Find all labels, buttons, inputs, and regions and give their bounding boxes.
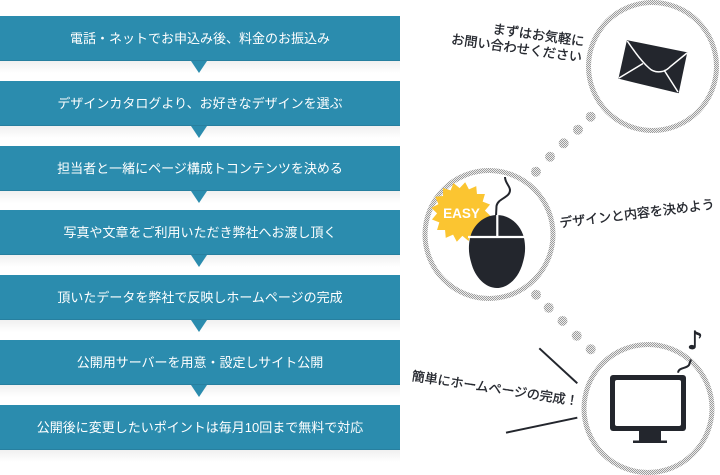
step 4: 写真や文章をご利用いただき弊社へお渡し頂く bbox=[63, 225, 336, 240]
ring: mail bbox=[588, 2, 716, 130]
ring: monitor bbox=[584, 344, 712, 472]
ring: mouse bbox=[425, 170, 553, 298]
connector dots: middle to bottom bbox=[531, 290, 596, 354]
step 5 bbox=[0, 275, 400, 332]
caption: monitor: 簡単にホームページの完成！ bbox=[411, 368, 580, 409]
step 3: 担当者と一緒にページ構成トコンテンツを決める bbox=[57, 161, 343, 176]
step 3 bbox=[0, 146, 400, 203]
step 1 bbox=[0, 16, 400, 73]
step 2 bbox=[0, 81, 400, 138]
connector dots: top to middle bbox=[531, 112, 596, 177]
step 1: 電話・ネットでお申込み後、料金のお振込み bbox=[70, 31, 330, 46]
caption: mail: お問い合わせください bbox=[450, 32, 583, 65]
icon: EASY starburst bbox=[427, 178, 495, 246]
caption: mouse: デザインと内容を決めよう bbox=[559, 197, 715, 230]
icon: mouse bbox=[468, 177, 526, 288]
step 6: 公開用サーバーを用意・設定しサイト公開 bbox=[77, 355, 323, 370]
step 2: デザインカタログより、お好きなデザインを選ぶ bbox=[57, 96, 343, 111]
step 4 bbox=[0, 210, 400, 267]
step 5: 頂いたデータを弊社で反映しホームページの完成 bbox=[57, 290, 343, 305]
icon: monitor bbox=[610, 360, 691, 443]
step 7 bbox=[0, 405, 400, 456]
icon: music note: ♪ bbox=[687, 326, 703, 355]
icon: EASY starburst: EASY bbox=[443, 206, 480, 221]
icon: envelope bbox=[619, 41, 687, 93]
step 6 bbox=[0, 340, 400, 397]
step 7: 公開後に変更したいポイントは毎月10回まで無料で対応 bbox=[37, 420, 363, 435]
burst lines bbox=[506, 348, 577, 433]
caption: mail: まずはお気軽に bbox=[492, 21, 585, 49]
